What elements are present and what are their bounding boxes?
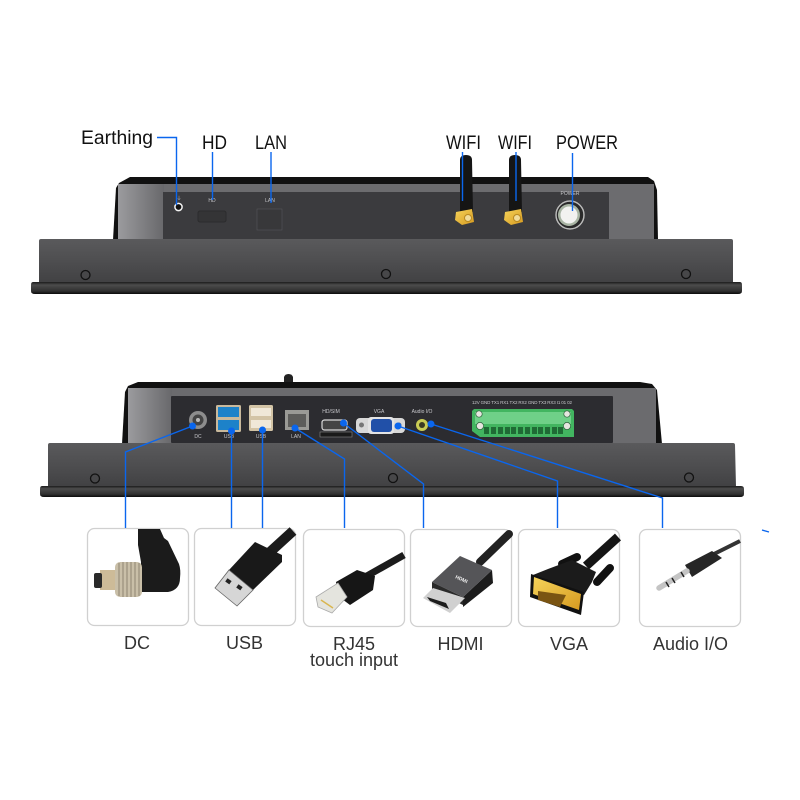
icon: VGA plug — [530, 537, 618, 615]
connector labels: RJ45 — [333, 634, 375, 654]
LAN port: LAN — [291, 434, 301, 440]
connector card: DC — [88, 528, 188, 626]
screws — [90, 473, 694, 483]
top callout labels — [81, 128, 618, 154]
connector labels: HDMI — [438, 634, 484, 654]
top callout labels: POWER — [556, 133, 618, 154]
connector card: USB — [194, 528, 296, 626]
USB 2 ports — [249, 405, 273, 440]
antenna stub — [284, 374, 293, 384]
DC jack: DC — [194, 434, 202, 440]
top callout labels: WIFI — [498, 133, 532, 154]
WIFI antenna left — [455, 155, 474, 225]
connector card: RJ45 — [304, 530, 404, 626]
icon: HDMI plug: HDMI — [454, 574, 469, 585]
connector labels: DC — [124, 633, 150, 653]
icon: audio jack — [659, 541, 740, 588]
connector card: Audio I/O — [640, 530, 740, 626]
connector labels: VGA — [550, 634, 588, 654]
device: top side view — [31, 155, 742, 294]
power button — [555, 191, 585, 230]
LAN port cover: LAN — [265, 198, 275, 204]
connector card: HDMI — [410, 530, 512, 626]
connector labels: USB — [226, 633, 263, 653]
LAN port cover — [257, 198, 282, 230]
icon: USB plug — [215, 531, 293, 606]
top callout labels: Earthing — [81, 128, 153, 149]
DC jack — [189, 411, 207, 440]
upper housing — [113, 177, 658, 240]
HD port cover — [198, 198, 226, 222]
top callout labels: WIFI — [446, 133, 481, 154]
USB 3 ports — [216, 405, 241, 440]
HD/SIM ports: HD/SIM — [322, 409, 340, 415]
LAN port — [285, 410, 309, 440]
connector labels — [124, 633, 728, 670]
earthing post — [175, 195, 182, 211]
screws — [81, 270, 690, 280]
WIFI antenna right — [504, 155, 523, 225]
green terminal block — [472, 400, 574, 437]
Audio jack — [412, 409, 433, 431]
leader lines: top device — [157, 138, 572, 211]
upper housing with I/O plate — [122, 382, 662, 444]
USB 2 ports: USB — [256, 434, 267, 440]
VGA port — [356, 409, 405, 434]
device: bottom side view — [40, 374, 744, 497]
connector labels: Audio I/O — [653, 634, 728, 654]
Audio jack: Audio I/O — [412, 409, 433, 415]
HD port cover: HD — [208, 198, 216, 204]
connector card: VGA — [518, 530, 620, 626]
earthing post: ⏚ — [176, 195, 182, 202]
USB 3 ports: USB — [224, 434, 235, 440]
green terminal block: 12V GND TX1 RX1 TX2 RX2 GND TX3 RX3 I1 01 02 — [472, 400, 572, 405]
power button: POWER — [561, 191, 580, 197]
VGA port: VGA — [374, 409, 385, 415]
leader dots — [189, 420, 434, 434]
leader lines: bottom device — [126, 423, 769, 532]
icon: DC plug — [94, 529, 180, 597]
top callout labels: HD — [202, 133, 227, 154]
HD/SIM ports — [320, 409, 352, 437]
connector labels: touch input — [310, 650, 398, 670]
icon: RJ45 plug — [316, 555, 404, 613]
front bezel bar — [31, 239, 742, 294]
front bezel bar — [40, 443, 744, 497]
top callout labels: LAN — [255, 133, 287, 154]
